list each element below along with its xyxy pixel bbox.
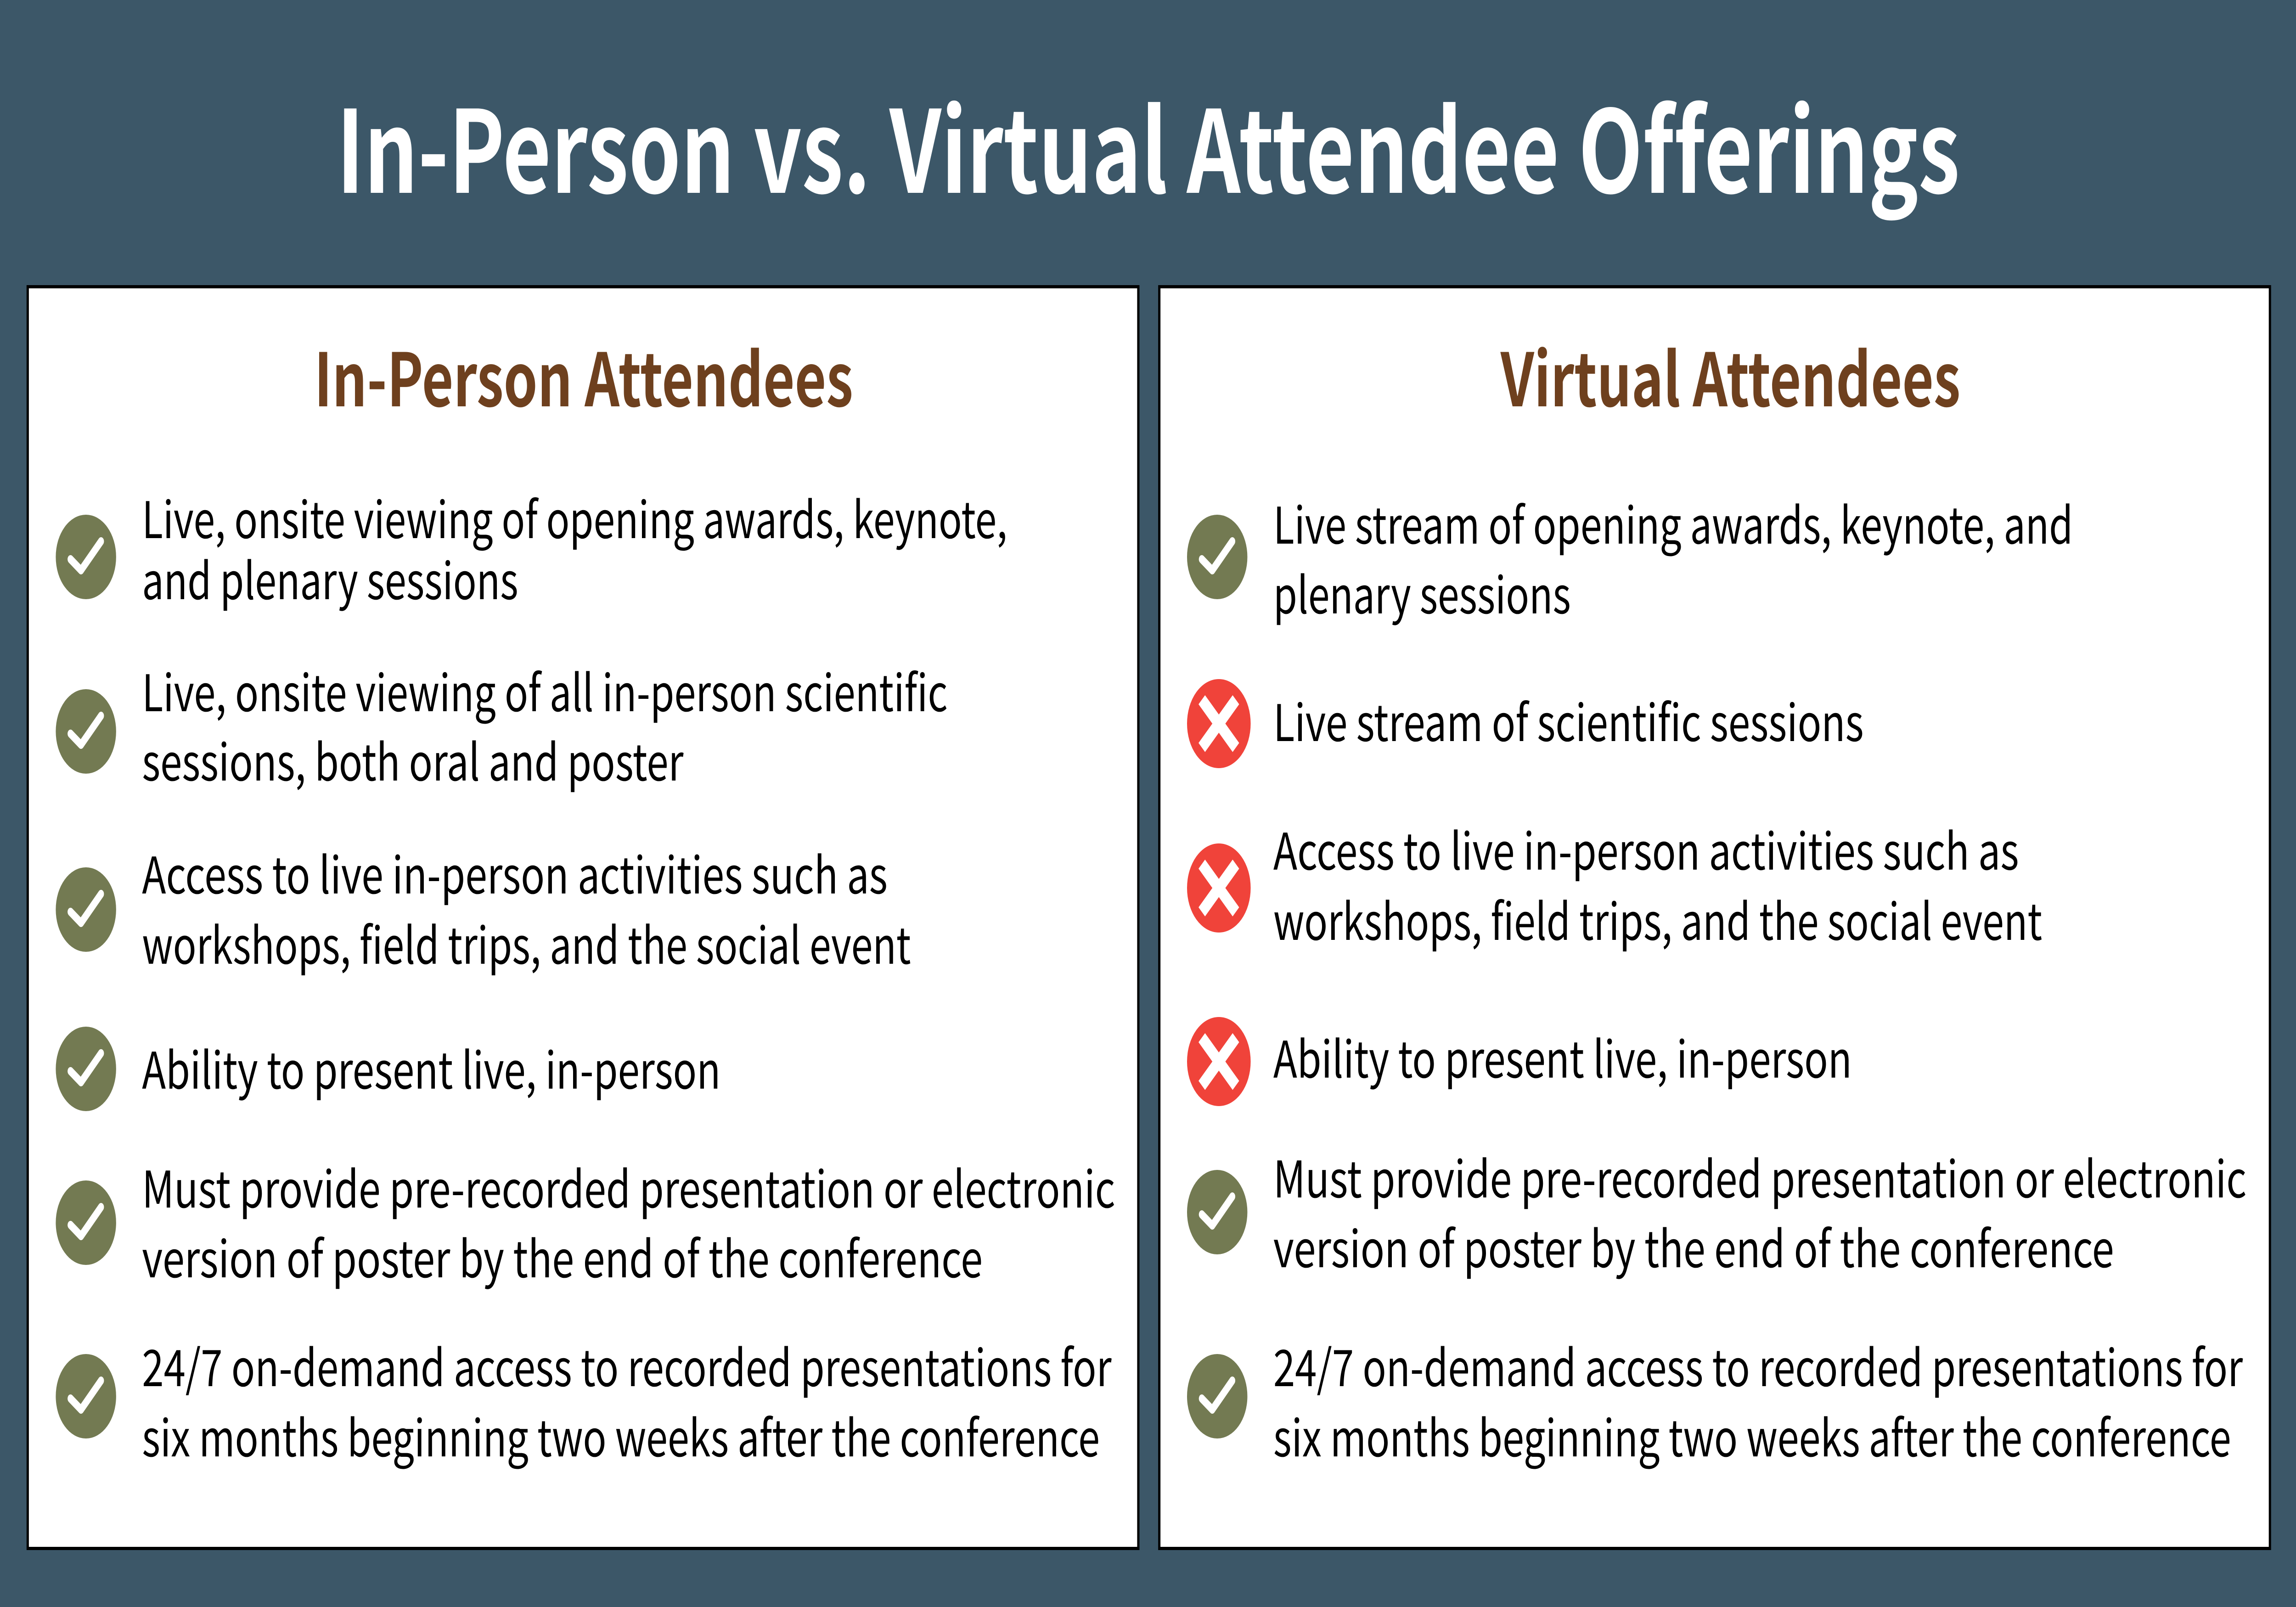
- heading: in-person attendees: In-Person Attendees: [314, 321, 853, 428]
- item: on-demand access: 24/7 on-demand access to recorded presentations for: [142, 1327, 1112, 1401]
- item: onsite viewing of opening sessions: [56, 479, 1007, 614]
- item: pre-recorded presentation: [56, 1149, 1115, 1292]
- item: onsite viewing of opening sessions: Live, onsite viewing of opening awards, keynote,: [142, 479, 1007, 553]
- item: pre-recorded presentation: version of poster by the end of the conference: [1273, 1208, 2114, 1282]
- heading: virtual attendees: Virtual Attendees: [1500, 321, 1960, 428]
- item: cannot present live: Ability to present live, in-person: [1273, 1019, 1852, 1092]
- item: in-person activities: workshops, field trips, and the social event: [142, 905, 911, 978]
- item: pre-recorded presentation: [1187, 1139, 2246, 1282]
- panel: in-person attendees: [28, 287, 1138, 1548]
- item: onsite viewing of opening sessions: and plenary sessions: [142, 540, 518, 614]
- item: cannot present live: [1187, 1017, 1852, 1106]
- item: no live stream of scientific sessions: Live stream of scientific sessions: [1273, 682, 1864, 756]
- title: In-Person vs. Virtual Attendee Offerings: [337, 61, 1960, 226]
- item: no in-person activities: workshops, field trips, and the social event: [1273, 881, 2042, 955]
- item: present live: Ability to present live, in-person: [142, 1030, 720, 1103]
- item: no in-person activities: [1187, 811, 2042, 955]
- item: on-demand access: six months beginning two weeks after the conference: [142, 1398, 1100, 1471]
- item: present live: [56, 1027, 720, 1111]
- item: pre-recorded presentation: version of poster by the end of the conference: [142, 1219, 983, 1292]
- item: onsite viewing of scientific sessions: sessions, both oral and poster: [142, 722, 684, 795]
- item: pre-recorded presentation: Must provide pre-recorded presentation or electronic: [142, 1149, 1115, 1222]
- item: on-demand access: 24/7 on-demand access to recorded presentations for: [1273, 1327, 2243, 1401]
- item: no in-person activities: Access to live in-person activities such as: [1273, 811, 2019, 884]
- item: onsite viewing of scientific sessions: [56, 652, 948, 795]
- item: on-demand access: [1187, 1327, 2243, 1471]
- item: in-person activities: [56, 835, 911, 978]
- item: no live stream of scientific sessions: [1187, 679, 1864, 768]
- item: on-demand access: [56, 1327, 1112, 1471]
- item: on-demand access: six months beginning two weeks after the conference: [1273, 1398, 2231, 1471]
- item: live stream of opening sessions: [1187, 485, 2073, 628]
- item: live stream of opening sessions: plenary sessions: [1273, 555, 1571, 628]
- panel: virtual attendees: [1159, 287, 2270, 1548]
- item: onsite viewing of scientific sessions: Live, onsite viewing of all in-person scientific: [142, 652, 948, 726]
- item: live stream of opening sessions: Live stream of opening awards, keynote, and: [1273, 485, 2073, 558]
- item: pre-recorded presentation: Must provide pre-recorded presentation or electronic: [1273, 1139, 2246, 1212]
- item: in-person activities: Access to live in-person activities such as: [142, 835, 888, 908]
